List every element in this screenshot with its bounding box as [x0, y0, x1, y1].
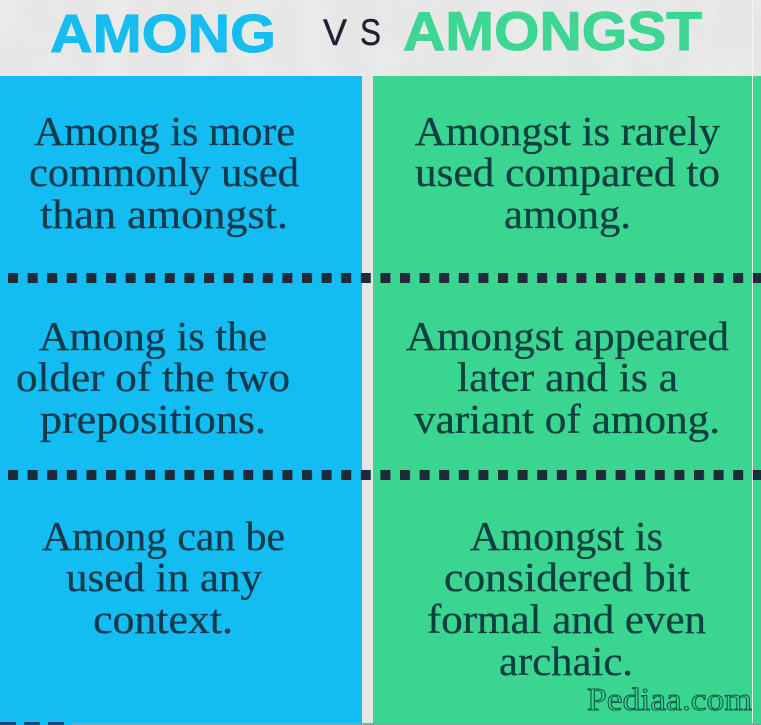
text: among row 1: than amongst. — [40, 191, 288, 237]
text: amongst row 2: variant of among. — [414, 396, 720, 442]
text: among row 1 — [29, 108, 299, 237]
text: amongst row 3: formal and even — [427, 596, 706, 642]
text: amongst row 2: Amongst appeared — [406, 313, 729, 359]
text: among row 2 — [16, 313, 290, 442]
right edge line — [752, 0, 753, 725]
text: amongst row 3 — [427, 513, 706, 684]
heading: among: AMONG — [50, 4, 276, 64]
text: among row 1: Among is more — [34, 108, 295, 154]
text: amongst row 1: among. — [504, 191, 631, 237]
faint bottom dashes — [72, 723, 761, 725]
text: among row 2: prepositions. — [40, 396, 266, 442]
bottom dashed row — [0, 722, 72, 725]
watermark: Pediaa.com — [587, 681, 752, 717]
title — [50, 0, 702, 64]
text: among row 2: Among is the — [39, 313, 267, 359]
paper texture — [0, 0, 761, 76]
text: among row 3: context. — [93, 596, 233, 642]
text: among row 3 — [42, 513, 285, 642]
text: amongst row 1 — [415, 108, 721, 237]
text: among row 2: older of the two — [16, 354, 290, 400]
divider: second dotted row — [0, 470, 761, 480]
divider: first dotted row — [0, 273, 761, 283]
text: among row 3: used in any — [66, 554, 263, 600]
text: amongst row 3: considered bit — [444, 554, 691, 600]
text: amongst row 1: used compared to — [415, 149, 720, 195]
text: among row 1: commonly used — [29, 149, 299, 195]
text: among row 3: Among can be — [42, 513, 285, 559]
heading: vs — [323, 12, 381, 53]
heading: vs: V — [323, 12, 347, 53]
heading: amongst: AMONGST — [403, 0, 702, 62]
text: amongst row 2: later and is a — [457, 354, 678, 400]
text: amongst row 2 — [406, 313, 729, 442]
heading: vs: S — [360, 12, 381, 53]
text: amongst row 1: Amongst is rarely — [415, 108, 721, 154]
panel: among column — [0, 76, 362, 725]
text: amongst row 3: archaic. — [499, 638, 633, 684]
panel: amongst column — [373, 76, 761, 725]
text: amongst row 3: Amongst is — [470, 513, 663, 559]
